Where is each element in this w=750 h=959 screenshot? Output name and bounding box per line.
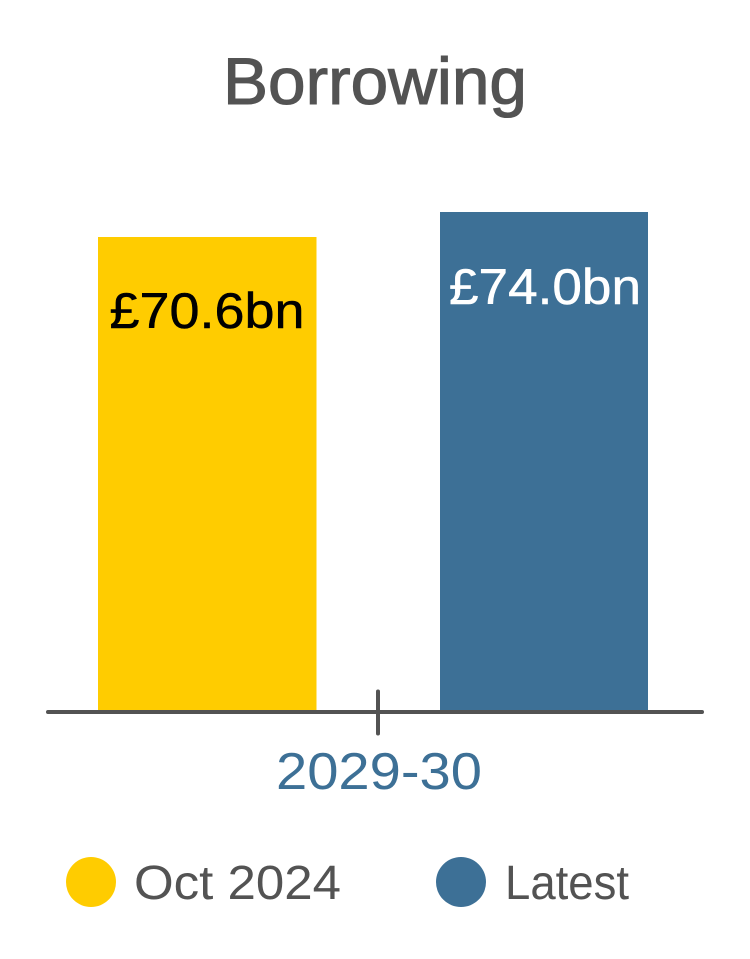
- axis label: 2029-30: [276, 743, 482, 801]
- bar: Latest: [440, 212, 648, 712]
- legend: [66, 857, 629, 910]
- legend item: Latest: Latest: [505, 857, 629, 910]
- bar: Oct 2024: [98, 237, 316, 712]
- value label: Oct 2024: £70.6bn: [110, 283, 304, 339]
- legend item: Oct 2024: Oct 2024: [134, 857, 341, 910]
- axis: [48, 692, 702, 734]
- value label: Latest: £74.0bn: [449, 259, 641, 315]
- bar chart: [48, 212, 702, 801]
- title: Borrowing: [223, 44, 527, 118]
- legend item: Latest: [436, 857, 629, 910]
